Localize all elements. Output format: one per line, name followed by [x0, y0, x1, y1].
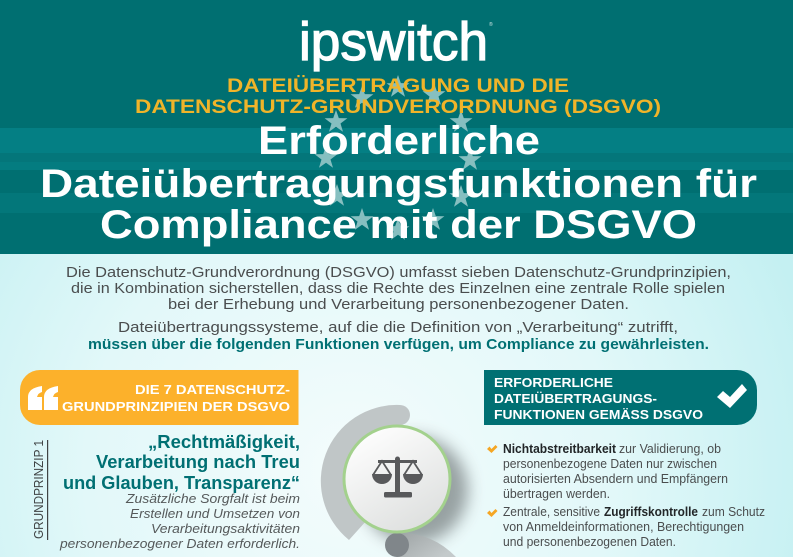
- bullet: Zugriffskontrolle: zum Schutz: [702, 504, 765, 519]
- intro paragraph: die in Kombination sicherstellen, dass die Rechte des Einzelnen eine zentrale Rolle spielen: [71, 280, 725, 297]
- header banner: [0, 0, 793, 254]
- intro paragraph: [66, 264, 731, 313]
- bullet: Nichtabstreitbarkeit: personenbezogene Daten nur zwischen: [503, 456, 717, 471]
- subtitle: DATEIÜBERTRAGUNG UND DIE: [227, 76, 569, 97]
- principle description: Verarbeitungsaktivitäten: [151, 521, 300, 536]
- icon: check mark: [717, 384, 747, 408]
- title: Compliance mit der DSGVO: [100, 203, 697, 247]
- bullet: Nichtabstreitbarkeit: [487, 441, 728, 501]
- intro paragraph: bei der Erhebung und Verarbeitung personenbezogener Daten.: [168, 296, 629, 313]
- left heading banner: GRUNDPRINZIPIEN DER DSGVO: [62, 399, 290, 414]
- logo: ipswitch: ®: [489, 21, 493, 28]
- bullet: Zugriffskontrolle: Zentrale, sensitive: [503, 504, 600, 519]
- principle heading: Verarbeitung nach Treu: [96, 452, 300, 472]
- principle description: [59, 491, 300, 551]
- EU star circle: [315, 75, 481, 240]
- right heading banner: [484, 370, 757, 425]
- left heading banner: [20, 370, 298, 425]
- principle heading: und Glauben, Transparenz“: [63, 473, 300, 493]
- compliance statement: müssen über die folgenden Funktionen verfügen, um Compliance zu gewährleisten.: [88, 336, 709, 353]
- bullet: Zugriffskontrolle: von Anmeldeinformationen, Berechtigungen: [503, 519, 744, 534]
- title: Erforderliche: [258, 119, 540, 163]
- right heading banner: FUNKTIONEN GEMÄSS DSGVO: [494, 407, 703, 422]
- title: Dateiübertragungsfunktionen für: [40, 162, 757, 206]
- icon: scales of justice: [372, 456, 423, 498]
- right heading banner: DATEIÜBERTRAGUNGS-: [494, 391, 657, 406]
- circular principle badge: [321, 405, 468, 557]
- icon: orange check: [487, 509, 498, 517]
- bullet: Nichtabstreitbarkeit: übertragen werden.: [503, 486, 610, 501]
- bullet: Nichtabstreitbarkeit: zur Validierung, ob: [619, 441, 721, 456]
- icon: quotation marks: [28, 386, 58, 410]
- principle heading: „Rechtmäßigkeit,: [148, 432, 300, 452]
- principle description: Zusätzliche Sorgfalt ist beim: [125, 491, 300, 506]
- principle description: personenbezogener Daten erforderlich.: [59, 536, 300, 551]
- compliance statement: [88, 319, 709, 353]
- page background: [0, 254, 793, 557]
- icon: orange check: [487, 445, 498, 453]
- principle description: Erstellen und Umsetzen von: [130, 506, 300, 521]
- bullet: Zugriffskontrolle: Zugriffskontrolle: [604, 504, 698, 519]
- bullet: Nichtabstreitbarkeit: Nichtabstreitbarkeit: [503, 441, 617, 456]
- right heading banner: ERFORDERLICHE: [494, 375, 613, 390]
- bullet: Zugriffskontrolle: und personenbezogenen Daten.: [503, 534, 676, 549]
- subtitle: [135, 76, 661, 118]
- principle heading: [63, 432, 300, 493]
- left heading banner: DIE 7 DATENSCHUTZ-: [135, 382, 290, 397]
- bullet: Zugriffskontrolle: [487, 504, 765, 549]
- title: [40, 119, 757, 247]
- bullet: Nichtabstreitbarkeit: autorisierten Absendern und Empfängern: [503, 471, 728, 486]
- subtitle: DATENSCHUTZ-GRUNDVERORDNUNG (DSGVO): [135, 97, 661, 118]
- principle number label: GRUNDPRINZIP 1: [31, 440, 46, 539]
- compliance statement: Dateiübertragungssysteme, auf die die Definition von „Verarbeitung“ zutrifft,: [118, 319, 678, 336]
- logo: ipswitch: ipswitch: [299, 12, 488, 72]
- intro paragraph: Die Datenschutz-Grundverordnung (DSGVO) umfasst sieben Datenschutz-Grundprinzipien,: [66, 264, 731, 281]
